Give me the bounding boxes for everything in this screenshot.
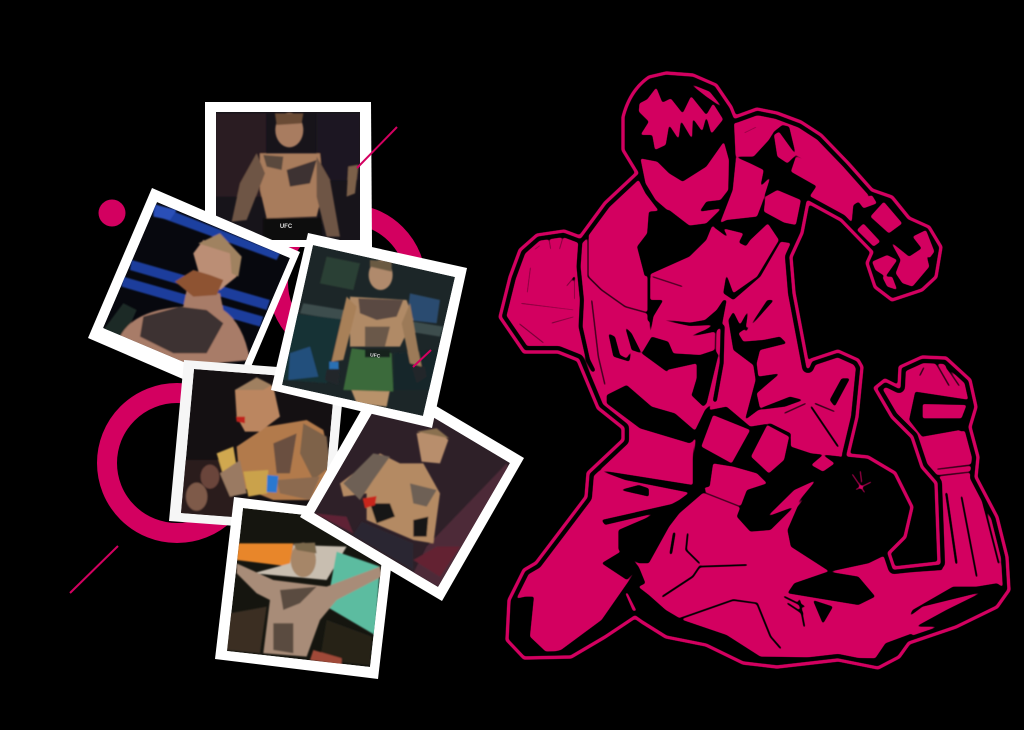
lower section details bbox=[507, 363, 1007, 667]
photo 3: fighter in green shorts bbox=[271, 233, 467, 428]
decor: line over photo 3 bbox=[413, 350, 431, 367]
decor: dot bbox=[98, 200, 126, 226]
back and arm lines bbox=[524, 403, 999, 648]
raised arm and glove bbox=[713, 125, 820, 300]
photo 6: fighter with flag bbox=[215, 497, 397, 679]
lower fighter head bbox=[787, 457, 912, 572]
photo 1: fighter with tattoos bbox=[205, 102, 372, 252]
raised glove wraps bbox=[909, 363, 973, 476]
thigh, shorts and leg shadows bbox=[507, 378, 1007, 667]
decor: upper ring bbox=[278, 214, 416, 352]
upper fighter details bbox=[519, 75, 940, 370]
photo 2: bearded fighter bbox=[88, 188, 300, 379]
head bbox=[624, 75, 736, 233]
waist and forearm shadows bbox=[592, 300, 803, 443]
head hair marks bbox=[852, 470, 872, 493]
label: UFC shorts: UFC bbox=[280, 224, 293, 230]
decor: lower ring bbox=[107, 393, 247, 533]
muscle lines bbox=[519, 127, 764, 370]
decor: line over photo 1 bbox=[357, 127, 397, 168]
decor: diagonal line bbox=[70, 546, 118, 593]
chest shadow bbox=[637, 210, 713, 277]
photo 5: fighter in the cage bbox=[300, 406, 524, 601]
fighter illustration bbox=[490, 60, 1024, 680]
fighter outline bbox=[500, 73, 1009, 668]
photo 4: fighter with gold gloves bbox=[169, 360, 345, 533]
clenched glove bbox=[693, 407, 842, 532]
label: UFC waistband: UFC bbox=[370, 352, 381, 360]
right fist bbox=[852, 193, 940, 297]
